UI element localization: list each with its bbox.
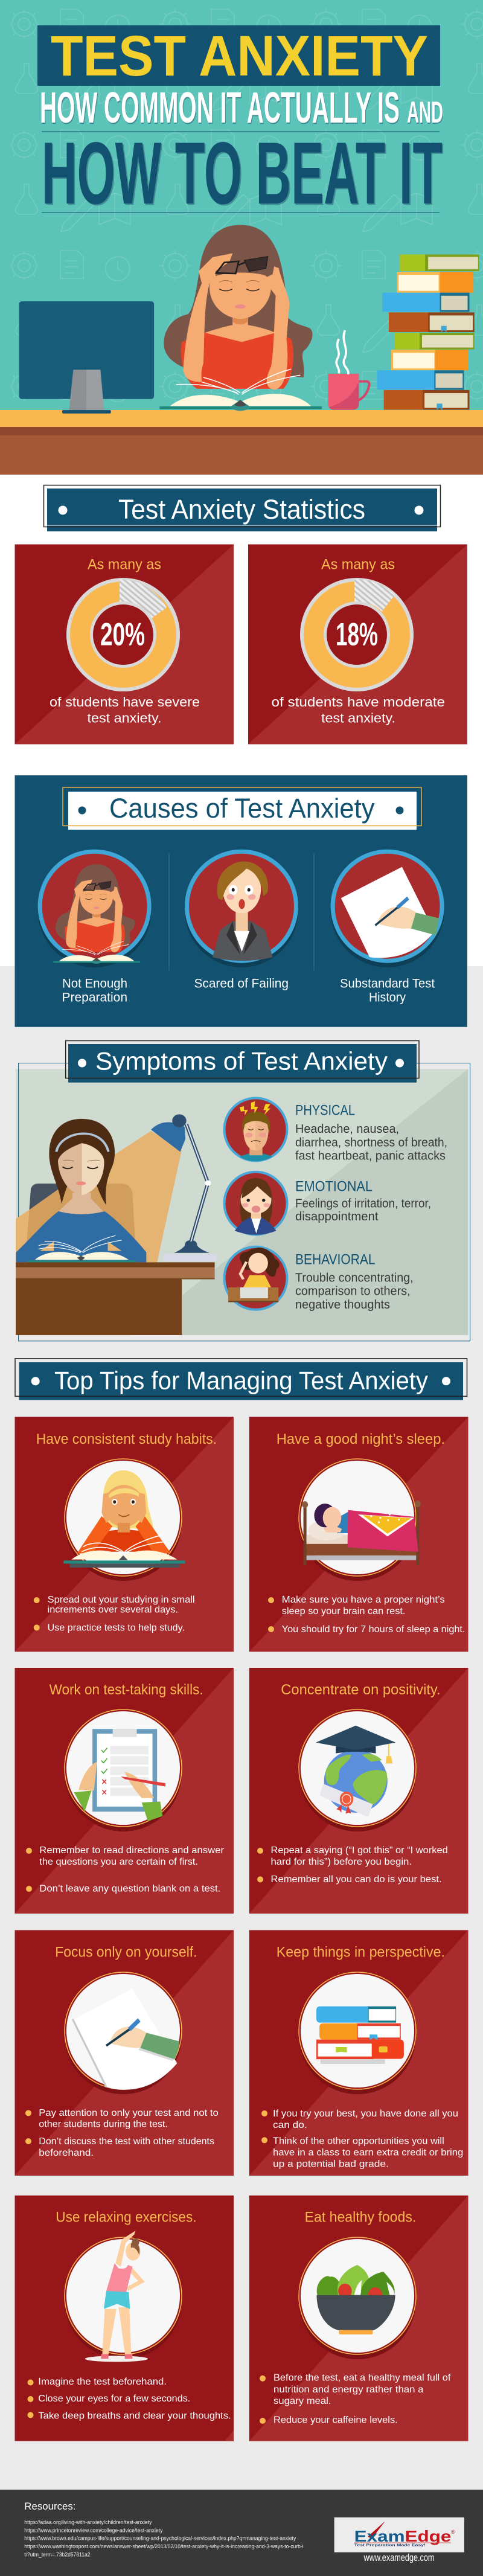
tips list: Don’t discuss the test with other students (39, 2136, 214, 2147)
resources list: https://adaa.org/living-with-anxiety/children/test-anxiety (24, 2519, 152, 2526)
caption: moderate: test anxiety. (321, 711, 395, 726)
tip card: focus on yourself (14, 1930, 234, 2176)
tips list: Pay attention to only your test and not to (39, 2108, 219, 2118)
tip card: sleep (249, 1417, 469, 1652)
illustration: stressed student reading (159, 225, 322, 411)
heading: Use relaxing exercises. (56, 2209, 197, 2226)
tips list (260, 2373, 451, 2425)
label: substandard test history: History (369, 990, 406, 1005)
text: physical: Headache, nausea, (295, 1123, 399, 1136)
label: scared of failing: Scared of Failing (194, 977, 289, 991)
tips list: increments over several days. (48, 1605, 178, 1615)
heading: Work on test-taking skills. (50, 1682, 203, 1698)
resources list: https://www.washingtonpost.com/news/answer-sheet/wp/2013/02/10/test-anxiety-why-it-is-increasing-and-3-ways-to-curb-i (24, 2543, 304, 2550)
label: as many as: As many as (88, 557, 161, 573)
text: emotional: EMOTIONAL (295, 1179, 373, 1195)
heading: Keep things in perspective. (277, 1944, 445, 1961)
banner: top tips: Top Tips for Managing Test Anxiety (54, 1366, 428, 1395)
tips list: Make sure you have a proper night’s (282, 1595, 445, 1605)
donut chart: 18 percent: 18% (336, 617, 378, 653)
tips list: sleep so your brain can rest. (282, 1606, 405, 1616)
resources heading: Resources: (24, 2501, 75, 2512)
tips list: Imagine the test beforehand. (38, 2377, 167, 2387)
header panel (0, 0, 483, 475)
heading: Have a good night’s sleep. (277, 1431, 445, 1447)
tips list (34, 1595, 195, 1633)
tips list (261, 2109, 463, 2170)
heading: Focus only on yourself. (55, 1944, 197, 1961)
heading: Eat healthy foods. (305, 2209, 416, 2226)
icon: stack of books (377, 254, 479, 410)
tips list: Close your eyes for a few seconds. (38, 2394, 190, 2404)
caption: moderate (272, 694, 445, 726)
tips list: Remember all you can do is your best. (270, 1874, 442, 1885)
text: physical: diarrhea, shortness of breath, (295, 1136, 447, 1150)
tips list (25, 2108, 219, 2158)
tips list: beforehand. (39, 2148, 94, 2158)
label: not enough preparation: Not Enough (62, 977, 127, 991)
text: behavioral: Trouble concentrating, (295, 1272, 414, 1285)
tips list: Repeat a saying (“I got this” or “I worked (270, 1845, 448, 1856)
tips list: Use practice tests to help study. (48, 1623, 185, 1633)
tips list: have in a class to earn extra credit or bring (273, 2147, 463, 2158)
caption: severe: test anxiety. (87, 711, 162, 726)
tips list: up a potential bad grade. (273, 2159, 389, 2170)
tips list: other students during the test. (39, 2119, 168, 2129)
tips list: hard for this”) before you begin. (270, 1857, 412, 1867)
tip card: relaxing exercises (14, 2196, 234, 2441)
tips list: Before the test, eat a healthy meal full of (273, 2373, 451, 2383)
tips list: If you try your best, you have done all you (273, 2109, 458, 2119)
tips list: the questions you are certain of first. (39, 1857, 198, 1867)
cause: substandard test history (331, 850, 444, 1005)
banner: top tips (15, 1359, 467, 1400)
illustration: scared woman (213, 862, 273, 961)
donut chart: 20 percent (66, 578, 180, 691)
text: emotional: Feelings of irritation, terror, (295, 1197, 431, 1210)
banner: symptoms: Symptoms of Test Anxiety (95, 1047, 388, 1075)
donut chart: 20 percent: 20% (100, 617, 145, 653)
text: physical: fast heartbeat, panic attacks (295, 1149, 446, 1162)
banner: symptoms (66, 1041, 419, 1083)
text: behavioral: negative thoughts (295, 1298, 390, 1312)
title: test anxiety: TEST ANXIETY (51, 24, 428, 88)
logo: examedge: Exam Edge (354, 2527, 451, 2545)
illustration: stressed student (53, 864, 140, 964)
tip card: test-taking skills (14, 1668, 234, 1914)
text: behavioral: comparison to others, (295, 1285, 411, 1298)
text: emotional: disappointment (295, 1210, 379, 1223)
heading: Concentrate on positivity. (281, 1682, 441, 1698)
tips list (257, 1845, 448, 1885)
grey lower background (0, 966, 483, 2490)
caption: severe (50, 694, 200, 726)
banner: test anxiety statistics: Test Anxiety Statistics (118, 494, 365, 525)
logo: examedge: Test Preparation Made Easy! (354, 2544, 426, 2548)
label: substandard test history (340, 977, 435, 1005)
tips list: can do. (273, 2120, 307, 2130)
icon: emotional symptom (223, 1171, 289, 1236)
resources list: t/?utm_term=.73b2d57811a2 (24, 2551, 90, 2558)
icon: physical symptom (223, 1097, 289, 1162)
tips list (26, 1845, 225, 1894)
subtitle line: how common: AND (408, 97, 444, 130)
label: as many as: As many as (321, 557, 395, 573)
icon: computer monitor (19, 301, 154, 414)
resources list: https://www.princetonreview.com/college-advice/test-anxiety (24, 2527, 163, 2534)
tips list: Don’t leave any question blank on a test. (39, 1884, 220, 1894)
illustration: writing hand (65, 1972, 182, 2094)
label: not enough preparation: Preparation (62, 990, 127, 1005)
label: substandard test history: Substandard Test (340, 977, 435, 991)
tip card: perspective (249, 1930, 469, 2176)
footer (0, 2490, 483, 2576)
subtitle line: how common: AND (407, 95, 443, 129)
panel: 18 percent statistic (248, 545, 467, 744)
tip card: study habits (14, 1417, 234, 1652)
illustration: globe with graduation cap (299, 1709, 416, 1831)
illustration: clipboard checklist (65, 1709, 182, 1831)
desk (0, 410, 483, 475)
tips list: sugary meal. (273, 2396, 331, 2406)
resources list (24, 2519, 304, 2558)
illustration: writing hand on paper (341, 867, 439, 958)
banner: causes (63, 787, 421, 830)
caption: moderate: of students have moderate (272, 694, 445, 710)
illustration: student at desk with lamp (16, 1114, 217, 1335)
icon: coffee mug (328, 330, 369, 410)
website url: www.examedge.com (363, 2552, 435, 2563)
donut chart: 18 percent (300, 578, 414, 691)
tip card: healthy foods (249, 2196, 469, 2441)
text: behavioral: BEHAVIORAL (295, 1252, 376, 1268)
illustration: child in bed (299, 1459, 421, 1581)
illustration: stacked books (299, 1972, 416, 2094)
text: emotional (295, 1179, 431, 1223)
panel: symptoms of test anxiety (16, 1041, 470, 1341)
caption: severe: of students have severe (50, 694, 200, 710)
banner: causes: Causes of Test Anxiety (109, 793, 375, 824)
text: physical: PHYSICAL (295, 1103, 355, 1119)
tips list: Take deep breaths and clear your thoughts. (38, 2411, 231, 2421)
tips list: Spread out your studying in small (48, 1595, 195, 1605)
label: not enough preparation (62, 977, 127, 1005)
tips list (268, 1595, 465, 1635)
panel: 20 percent statistic (14, 545, 234, 744)
logo: examedge (334, 2517, 464, 2552)
logo: examedge: ® (451, 2529, 455, 2535)
tips list: Think of the other opportunities you will (273, 2136, 444, 2146)
icon: behavioral symptom (223, 1246, 289, 1311)
text: behavioral (295, 1252, 414, 1312)
illustration: salad bowl (299, 2237, 416, 2359)
tips list: Remember to read directions and answer (39, 1845, 225, 1856)
panel: causes of test anxiety (14, 775, 467, 1027)
illustration: girl reading (63, 1459, 185, 1581)
tips list: Reduce your caffeine levels. (273, 2415, 398, 2425)
tips list: You should try for 7 hours of sleep a night. (282, 1624, 465, 1635)
resources list: https://www.brown.edu/campus-life/support/counseling-and-psychological-services/index.php?q=managing-test-anxiety (24, 2536, 296, 2542)
cause: scared of failing (185, 850, 298, 991)
cause: not enough preparation (38, 850, 152, 1005)
illustration: woman stretching (65, 2231, 182, 2362)
text: physical (295, 1103, 447, 1162)
tip card: positivity (249, 1668, 469, 1914)
banner: test anxiety statistics (43, 485, 441, 531)
tips list: nutrition and energy rather than a (273, 2385, 424, 2395)
heading: Have consistent study habits. (36, 1431, 217, 1447)
tips list (28, 2377, 231, 2421)
